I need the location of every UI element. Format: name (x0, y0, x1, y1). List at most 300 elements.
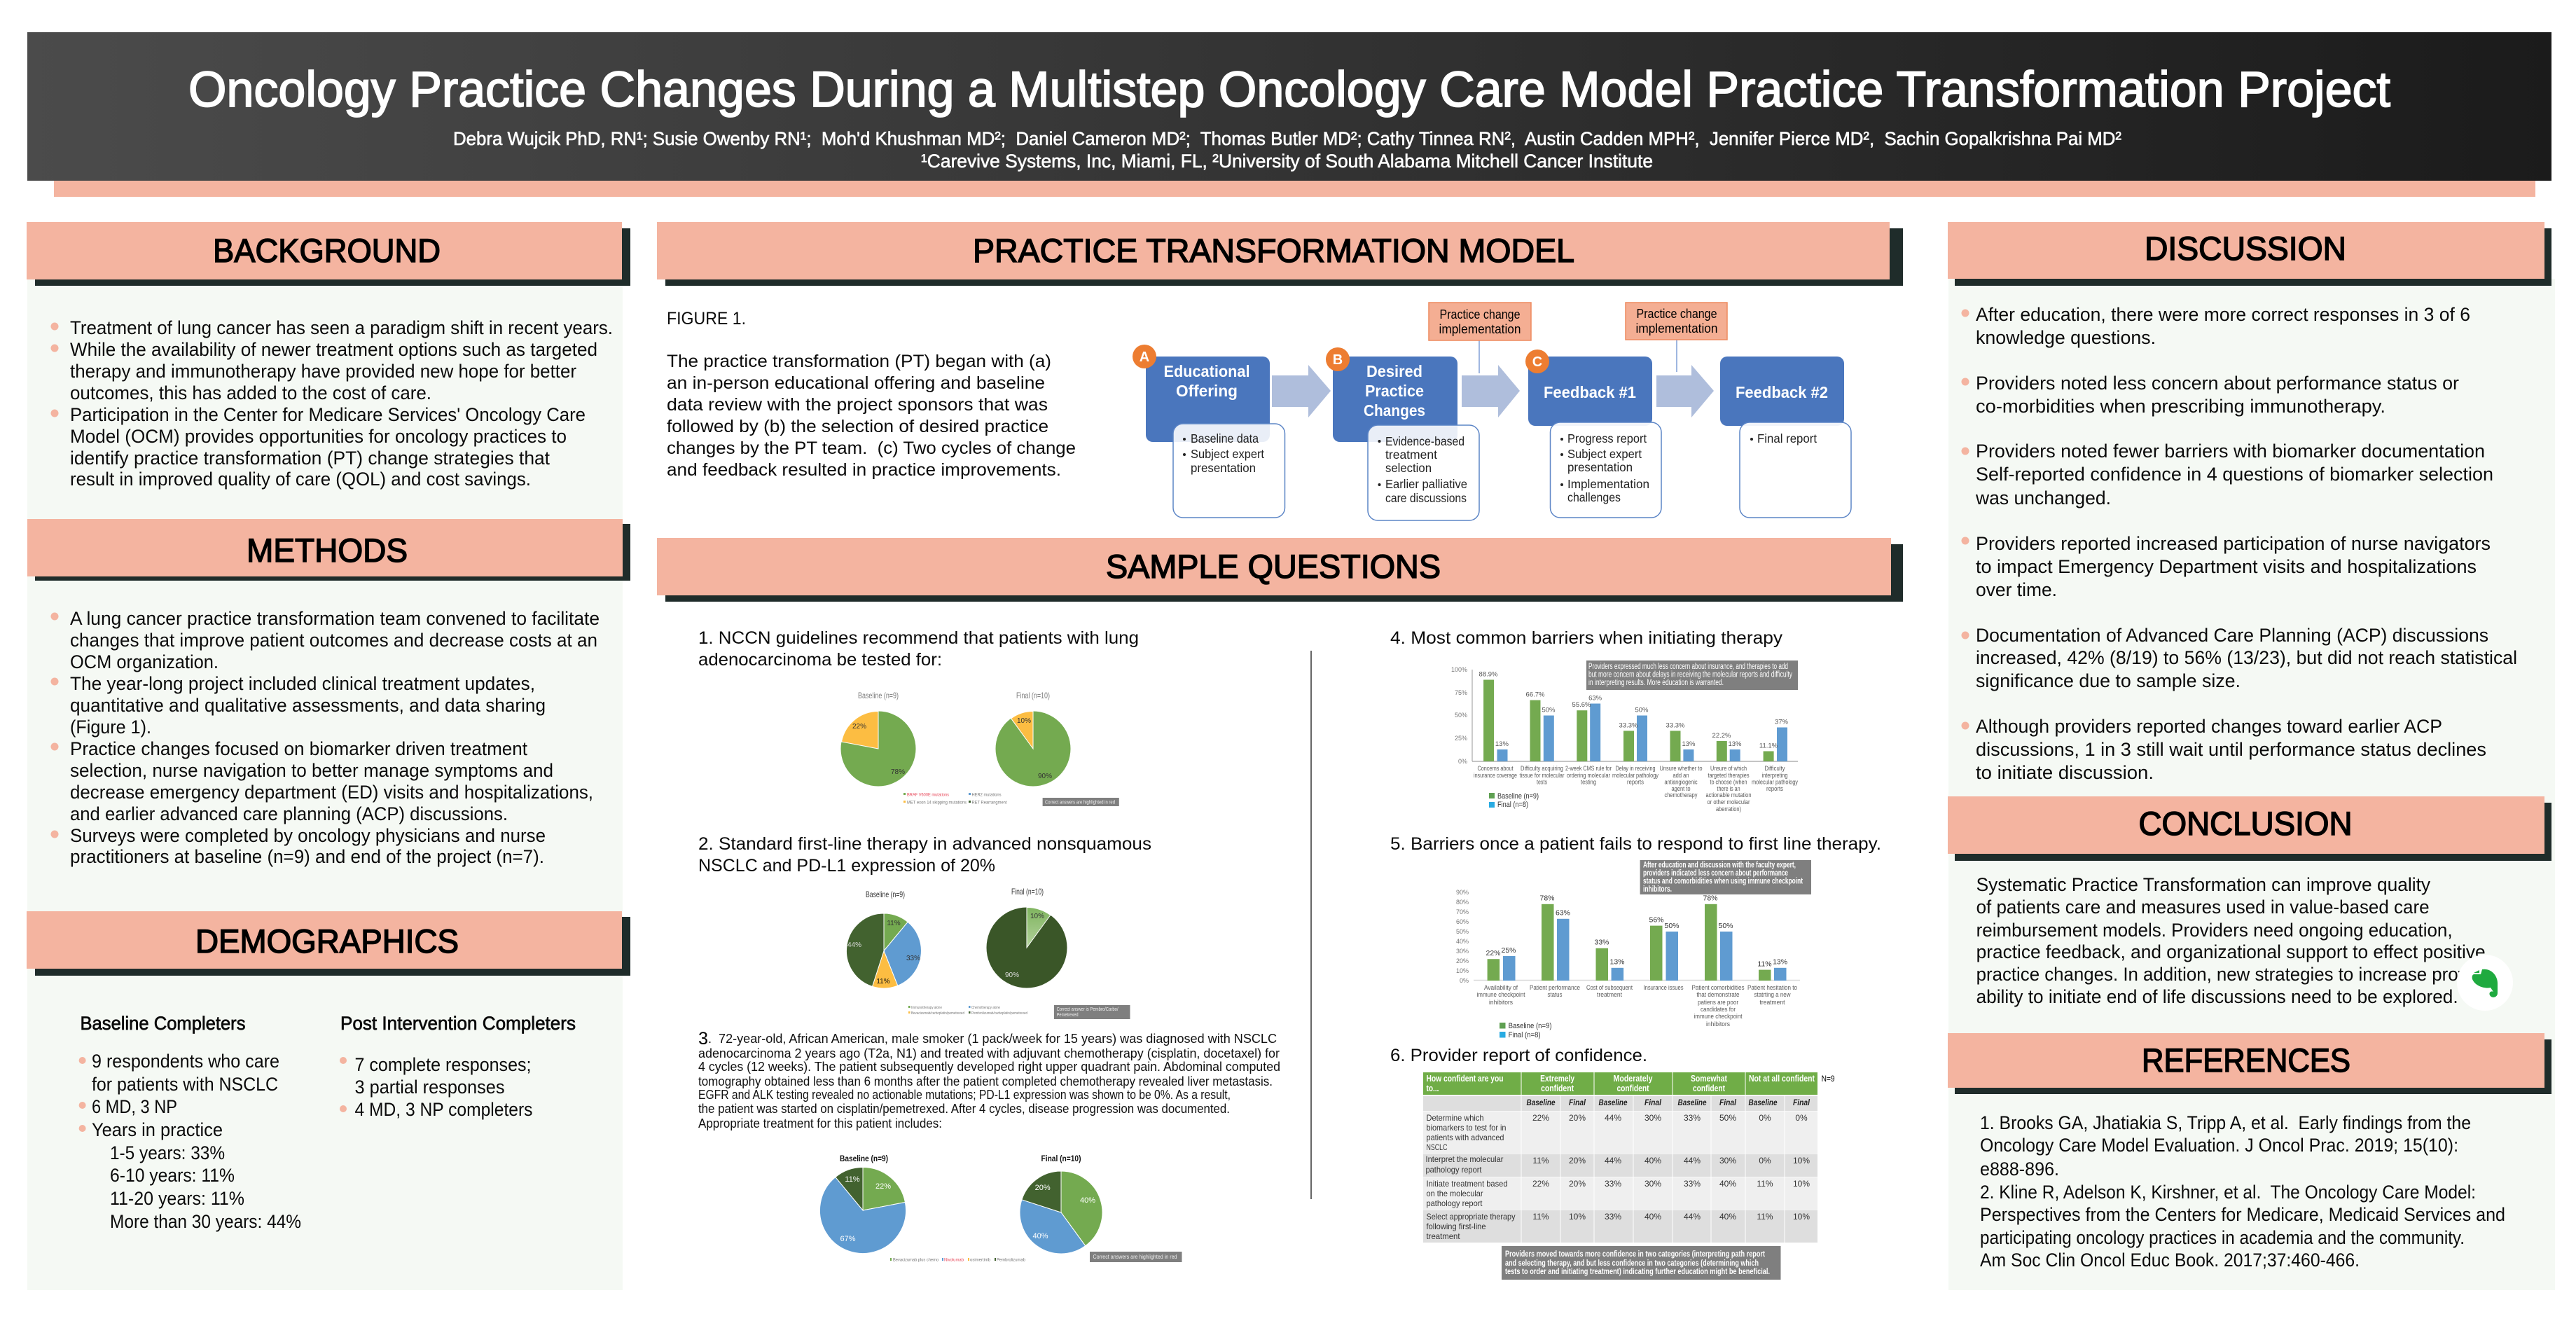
heading: practice transformation model: PRACTICE TRANSFORMATION MODEL (973, 232, 1574, 269)
discussion bullets: to impact Emergency Department visits and hospitalizations (1976, 556, 2477, 577)
question 3: 4 cycles (12 weeks). The patient subsequently developed right upper quadrant pain. Abdominal computed (698, 1060, 1280, 1074)
baseline completers: Baseline Completers (80, 1013, 245, 1034)
bar chart: q5: patiens are poor (1698, 999, 1738, 1006)
bar chart: q4: 25% (1455, 735, 1467, 742)
q6 callout: Providers moved towards more confidence in two categories (interpreting path report (1505, 1250, 1765, 1259)
table: provider confidence: 0% (1759, 1156, 1771, 1166)
methods bullets: Practice changes focused on biomarker driven treatment (70, 738, 527, 759)
reference list: 2. Kline R, Adelson K, Kirshner, et al. The Oncology Care Model: (1980, 1182, 2476, 1203)
table: provider confidence: 0% (1795, 1113, 1808, 1123)
background bullets (50, 317, 613, 490)
bar chart: q5: 78% (1539, 894, 1555, 902)
reference list (1980, 1112, 2505, 1271)
bar chart: q5: candidates for (1701, 1006, 1736, 1013)
table: provider confidence: confident (1693, 1084, 1726, 1093)
question 3: tomography obtained less than 6 months after the patient completed chemotherapy revealed liver metastasis. (698, 1074, 1273, 1088)
table: provider confidence: Baseline (1527, 1098, 1556, 1107)
bar chart: q4: reports (1766, 785, 1783, 792)
q1 note: Correct answers are highlighted in red (1045, 800, 1115, 805)
conclusion text (1976, 874, 2507, 1007)
question 5: 5. Barriers once a patient fails to respond to first line therapy. (1390, 834, 1881, 854)
bar chart: q5: Patient hesitation to (1747, 984, 1797, 991)
table: provider confidence: 33% (1684, 1113, 1701, 1123)
table: provider confidence: 40% (1719, 1179, 1736, 1189)
baseline completers: 1-5 years: 33% (110, 1142, 225, 1163)
conclusion text: practice changes. In addition, new strategies to increase providers (1976, 964, 2507, 985)
table: provider confidence: 44% (1684, 1156, 1701, 1166)
q2 note: Correct answer is Pembro/Carbo/ (1057, 1007, 1119, 1012)
background bullets: outcomes, this has added to the cost of care. (70, 382, 431, 403)
table: provider confidence: 44% (1605, 1156, 1621, 1166)
question 2 (698, 834, 1151, 1019)
baseline completers: Years in practice (92, 1119, 223, 1140)
pie chart: q1 baseline (840, 691, 916, 786)
discussion bullets: to initiate discussion. (1976, 762, 2154, 783)
bar chart: q5: 78% (1703, 894, 1718, 902)
callout: practice change 2 (1626, 303, 1727, 372)
methods bullets: changes that improve patient outcomes and decrease costs at an (70, 630, 597, 651)
table: provider confidence: 22% (1532, 1179, 1549, 1189)
discussion bullets: Documentation of Advanced Care Planning (ACP) discussions (1976, 625, 2488, 646)
discussion bullets: Although providers reported changes toward earlier ACP (1976, 716, 2442, 737)
discussion bullets: Providers noted fewer barriers with biomarker documentation (1976, 441, 2485, 462)
figure description: FIGURE 1. (667, 309, 746, 328)
bar chart: q4: 55.6% (1572, 701, 1591, 709)
q3 legend: Bevacizumab plus chemo (893, 1258, 939, 1262)
bar chart: q5: treatment (1759, 999, 1785, 1006)
pie chart: q1 final: 10% (1017, 717, 1031, 725)
question 1 (698, 628, 1139, 806)
bar chart: q4: Difficulty (1765, 765, 1785, 772)
q3 legend: osimertinib (970, 1258, 990, 1262)
q4 callout (1586, 660, 1798, 690)
pie chart: q1 final: 90% (1038, 773, 1052, 780)
bar chart: q4: Unsure of which (1710, 765, 1747, 772)
heading: discussion (1948, 222, 2551, 286)
methods bullets: and earlier advanced care planning (ACP) discussions. (70, 803, 508, 824)
q3 legend (890, 1258, 1025, 1262)
question 4 (1390, 628, 1798, 812)
right column background panel (1948, 279, 2555, 1290)
bar chart: q4: interpreting (1762, 772, 1787, 779)
q3 legend: Nivolumab (944, 1258, 964, 1262)
question 3: . 72-year-old, African American, male smoker (1 pack/week for 15 years) was diagnosed with NSCLC (708, 1032, 1277, 1046)
bar chart: q4: 66.7% (1526, 691, 1545, 699)
table: provider confidence: 0% (1759, 1113, 1771, 1123)
bar chart: q5: 50% (1456, 928, 1469, 935)
bar chart: q5: 33% (1594, 939, 1609, 947)
bar chart: q4: 100% (1451, 666, 1467, 673)
q5 legend (1500, 1022, 1552, 1039)
step C: feedback 1 (1525, 350, 1661, 518)
callout: practice change 2: Practice change (1636, 307, 1717, 321)
q4 callout: Providers expressed much less concern about insurance, and therapies to add (1588, 663, 1788, 671)
pie chart: q3 final (1020, 1154, 1102, 1254)
bar chart: q4: Unsure whether to (1660, 765, 1702, 772)
table: provider confidence: 10% (1793, 1212, 1810, 1222)
bar chart: q4: testing (1581, 779, 1596, 786)
table: provider confidence: 33% (1605, 1179, 1621, 1189)
pie chart: q1 baseline: 78% (891, 768, 905, 776)
bar chart: q4: tissue for molecular (1520, 772, 1565, 779)
table: provider confidence: confident (1616, 1084, 1649, 1093)
arrow 2 (1462, 365, 1520, 417)
bar chart: q4: Concerns about (1478, 765, 1514, 772)
reference list: 1. Brooks GA, Jhatiakia S, Tripp A, et al. Early findings from the (1980, 1112, 2471, 1133)
step A: educational offering: presentation (1191, 461, 1256, 475)
table: provider confidence: pathology report (1426, 1198, 1483, 1208)
conclusion text: ability to initiate end of life discussions need to be explored. (1976, 986, 2458, 1007)
step A: educational offering: Educational (1164, 362, 1249, 380)
title: Oncology Practice Changes During a Multistep Oncology Care Model Practice Transformation Project (188, 62, 2390, 118)
bar chart: q4: antiangiogenic (1664, 779, 1698, 786)
methods bullets: OCM organization. (70, 651, 219, 672)
discussion bullets: Providers noted less concern about performance status or (1976, 373, 2459, 394)
question 3: EGFR and ALK testing revealed no actionable mutations; PD-L1 expression was shown to be 0%. As a result, (698, 1088, 1231, 1102)
table: provider confidence: 10% (1793, 1156, 1810, 1166)
table: provider confidence: Select appropriate therapy (1426, 1212, 1516, 1222)
step B: desired practice changes: Evidence-based (1385, 434, 1464, 448)
table: provider confidence: patients with advanced (1426, 1133, 1504, 1142)
conclusion text: practice feedback, and organizational support to effect positive (1976, 941, 2486, 962)
bar chart: q5: statrting a new (1754, 991, 1791, 998)
bar chart: q4: tests (1537, 779, 1547, 786)
bar chart: q5: 22% (1486, 949, 1501, 957)
column divider (1310, 651, 1312, 1199)
panel: practice transformation model (657, 222, 1903, 520)
discussion bullets (1961, 304, 2517, 783)
bar chart: q4: or other molecular (1708, 798, 1750, 805)
pie chart: q3 baseline (819, 1154, 906, 1254)
table: provider confidence: Determine which (1426, 1113, 1483, 1123)
step B: desired practice changes: Earlier palliative (1385, 477, 1467, 491)
table: provider confidence: Extremely (1540, 1074, 1574, 1084)
heading: references: REFERENCES (2142, 1042, 2350, 1079)
panel: discussion (1948, 222, 2551, 783)
q1 legend: HER2 mutations (972, 793, 1002, 797)
step C: feedback 1: presentation (1567, 460, 1633, 474)
table: provider confidence: 20% (1569, 1156, 1586, 1166)
title banner (27, 32, 2551, 197)
table: provider confidence: 20% (1569, 1179, 1586, 1189)
panel: demographics (27, 911, 630, 1232)
methods bullets (50, 608, 600, 867)
bar chart: q4: 2-week CMS rule for (1565, 765, 1612, 772)
heading: demographics (27, 911, 630, 976)
baseline completers: More than 30 years: 44% (110, 1211, 301, 1232)
panel: sample questions (657, 538, 1903, 1280)
pie chart: q2 final: 90% (1005, 971, 1019, 979)
bar chart: q4: Difficulty acquiring (1521, 765, 1563, 772)
bar chart: q5: inhibitors (1489, 999, 1513, 1006)
q2 note (1054, 1005, 1130, 1019)
bar chart: q4: Delay in receiving (1615, 765, 1656, 772)
question 3: 3 (698, 1029, 708, 1049)
step D: feedback 2: Final report (1757, 431, 1817, 445)
q3 note: Correct answers are highlighted in red (1093, 1254, 1177, 1260)
pie chart: q1 baseline: 22% (852, 723, 866, 731)
heading: sample questions: SAMPLE QUESTIONS (1106, 548, 1441, 585)
heading: demographics: DEMOGRAPHICS (195, 922, 459, 960)
table: provider confidence: 33% (1605, 1212, 1621, 1222)
question 4: 4. Most common barriers when initiating therapy (1390, 628, 1783, 648)
bar chart: q4: 33.3% (1666, 721, 1685, 729)
table: provider confidence: 44% (1684, 1212, 1701, 1222)
bar chart: q4: 13% (1682, 740, 1696, 748)
authors: Debra Wujcik PhD, RN¹; Susie Owenby RN¹; Moh'd Khushman MD²; Daniel Cameron MD²; Thomas Butler MD²; Cathy Tinnea RN², Austin Cadden MPH², Jennifer Pierce MD², Sachin Gopalkrishna Pai MD² (453, 128, 2121, 149)
question 3: Appropriate treatment for this patient includes: (698, 1116, 942, 1130)
callout: practice change 1: implementation (1439, 322, 1521, 336)
discussion bullets: was unchanged. (1975, 487, 2111, 509)
bar chart: q4: 33.3% (1619, 721, 1638, 729)
q3 legend: Pembrolizumab (997, 1258, 1025, 1262)
bar chart: q4: 0% (1458, 758, 1467, 765)
table: provider confidence: Final (1719, 1098, 1737, 1107)
heading: conclusion: CONCLUSION (2139, 805, 2352, 842)
figure description: followed by (b) the selection of desired practice (667, 417, 1048, 436)
bar chart: q5: status (1548, 991, 1563, 998)
table: provider confidence: 11% (1532, 1156, 1549, 1166)
bar chart: q4: 88.9% (1479, 671, 1498, 678)
q2 note: Pemetrexed (1057, 1013, 1079, 1018)
step B: desired practice changes: treatment (1385, 448, 1437, 462)
methods bullets: A lung cancer practice transformation team convened to facilitate (70, 608, 600, 629)
bar chart: q4: molecular pathology (1752, 779, 1798, 786)
conclusion text: Systematic Practice Transformation can improve quality (1976, 874, 2431, 895)
table: provider confidence: 11% (1757, 1212, 1773, 1222)
bar chart: q4: 50% (1635, 706, 1649, 714)
post intervention completers: 4 MD, 3 NP completers (354, 1099, 532, 1120)
bar chart: q4: 63% (1588, 695, 1602, 702)
step C: feedback 1: Feedback #1 (1544, 383, 1636, 401)
step A: educational offering (1133, 345, 1284, 518)
question 3 (698, 1029, 1280, 1262)
discussion bullets: co-morbidities when prescribing immunotherapy. (1976, 396, 2385, 417)
q1 legend (903, 793, 1007, 805)
bar chart: q5: 11% (1757, 960, 1772, 968)
question 2: 2. Standard first-line therapy in advanced nonsquamous (698, 834, 1151, 854)
discussion bullets: After education, there were more correct responses in 3 of 6 (1976, 304, 2470, 325)
pie chart: q1 final: Final (n=10) (1016, 691, 1050, 700)
methods bullets: practitioners at baseline (n=9) and end of the project (n=7). (70, 846, 544, 867)
pie chart: q2 final: Final (n=10) (1011, 887, 1044, 897)
table: provider confidence: 22% (1532, 1113, 1549, 1123)
step B: desired practice changes: selection (1385, 461, 1432, 475)
icon: evernote elephant (2457, 955, 2513, 1011)
reference list: Am Soc Clin Oncol Educ Book. 2017;37:460-466. (1980, 1250, 2360, 1271)
heading: conclusion (1948, 796, 2551, 861)
pie chart: q1 baseline: Baseline (n=9) (858, 691, 899, 700)
background bullets: While the availability of newer treatment options such as targeted (70, 339, 597, 360)
table: provider confidence: Interpret the molecular (1426, 1154, 1503, 1164)
bar chart: q5: 13% (1773, 958, 1787, 967)
table: provider confidence: 30% (1644, 1113, 1661, 1123)
post intervention completers: Post Intervention Completers (340, 1013, 576, 1034)
reference list: participating oncology practices in academia and the community. (1980, 1227, 2465, 1248)
bar chart: q5: inhibitors (1706, 1021, 1730, 1028)
question 6: 6. Provider report of confidence. (1390, 1046, 1647, 1065)
figure description (667, 309, 1076, 480)
bar chart: q5: Cost of subsequent (1586, 984, 1633, 991)
table: provider confidence: Final (1569, 1098, 1586, 1107)
panel: background (27, 222, 630, 490)
table: provider confidence: Final (1644, 1098, 1662, 1107)
q2 legend: Immunotherapy alone (911, 1006, 942, 1010)
table: provider confidence: 10% (1569, 1212, 1586, 1222)
bar chart: q5: 60% (1456, 918, 1469, 925)
bar chart: q4: add an (1673, 772, 1689, 779)
conclusion text: reimbursement models. Providers need ongoing education, (1976, 920, 2453, 941)
table: provider confidence: 30% (1719, 1156, 1736, 1166)
pie chart: q2 baseline: 33% (906, 955, 920, 962)
heading: sample questions (657, 538, 1903, 602)
discussion bullets: significance due to sample size. (1976, 670, 2241, 691)
q4 callout: in interpreting results. More education is warranted. (1588, 679, 1724, 687)
background bullets: Treatment of lung cancer has seen a paradigm shift in recent years. (70, 317, 613, 338)
question 3: the patient was started on cisplatin/pemetrexed. After 4 cycles, disease progression was documented. (698, 1102, 1230, 1116)
post intervention completers: 3 partial responses (354, 1077, 504, 1098)
table: provider confidence: Baseline (1748, 1098, 1778, 1107)
table: provider confidence: Somewhat (1691, 1074, 1728, 1084)
q5 callout: After education and discussion with the faculty expert, (1643, 862, 1796, 870)
q5 legend: Final (n=8) (1509, 1031, 1541, 1039)
figure description: changes by the PT team. (c) Two cycles of change (667, 438, 1076, 458)
q2 legend: Bevacizumab/carboplatin/pemetrexed (911, 1011, 964, 1016)
table: provider confidence: Initiate treatment based (1426, 1179, 1507, 1189)
discussion bullets: Self-reported confidence in 4 questions of biomarker selection (1976, 464, 2493, 485)
bar chart: q4: 13% (1728, 740, 1742, 748)
bar chart: q4: 13% (1495, 740, 1509, 748)
bar chart: q4: there is an (1717, 785, 1740, 792)
methods bullets: quantitative and qualitative assessments, and data sharing (70, 695, 546, 716)
question 1: adenocarcinoma be tested for: (698, 650, 942, 670)
bar chart: q5: Patient performance (1530, 984, 1580, 991)
table: provider confidence: 40% (1644, 1212, 1661, 1222)
baseline completers: for patients with NSCLC (92, 1074, 278, 1095)
heading: background: BACKGROUND (213, 232, 441, 269)
background bullets: result in improved quality of care (QOL) and cost savings. (70, 469, 531, 490)
heading: background (27, 222, 630, 286)
q1 note (1043, 798, 1119, 806)
step B: desired practice changes: B (1333, 352, 1343, 368)
panel: conclusion (1948, 796, 2551, 1011)
bar chart: q4: ordering molecular (1567, 772, 1610, 779)
bar chart: q4: 11.1% (1759, 742, 1778, 749)
q4 legend (1489, 792, 1539, 809)
pie chart: q3 baseline: 11% (845, 1175, 860, 1184)
bar chart: q5: 10% (1456, 967, 1469, 974)
question 5 (1390, 834, 1881, 1039)
pie chart: q2 baseline (846, 890, 921, 988)
pie chart: q2 final: 10% (1030, 913, 1044, 920)
left column background panel (27, 279, 623, 1290)
step B: desired practice changes: Changes (1364, 401, 1425, 420)
bar chart: q5: 40% (1456, 938, 1469, 945)
bar chart: q4: reports (1627, 779, 1644, 786)
step A: educational offering: A (1140, 350, 1149, 365)
step A: educational offering: Baseline data (1191, 431, 1259, 445)
bar chart: q5: 56% (1649, 916, 1664, 925)
step A: educational offering: Subject expert (1191, 447, 1264, 461)
reference list: e888-896. (1980, 1159, 2059, 1180)
methods bullets: decrease emergency department (ED) visits and hospitalizations, (70, 782, 593, 803)
q6 callout (1502, 1246, 1780, 1280)
discussion bullets: increased, 42% (8/19) to 56% (13/23), but did not reach statistical (1976, 647, 2517, 668)
bar chart: q5: 13% (1609, 958, 1625, 967)
step C: feedback 1: Implementation (1567, 477, 1649, 491)
step D: feedback 2: Feedback #2 (1736, 383, 1828, 401)
table: provider confidence: 40% (1719, 1212, 1736, 1222)
pie chart: q1 final (996, 691, 1070, 786)
step B: desired practice changes: Practice (1365, 382, 1424, 400)
bar chart: q4: 50% (1542, 706, 1556, 714)
bar chart: q5: immune checkpoint (1476, 991, 1525, 998)
table: provider confidence: treatment (1426, 1231, 1460, 1241)
bar chart: q5 (1456, 889, 1800, 1028)
table: provider confidence: Moderately (1614, 1074, 1653, 1084)
bar chart: q4: 37% (1775, 719, 1789, 726)
table: provider confidence: 33% (1684, 1179, 1701, 1189)
bar chart: q5: 70% (1456, 908, 1469, 915)
question 3: adenocarcinoma 2 years ago (T2a, N1) and treated with adjuvant chemotherapy (cisplatin, docetaxel) for (698, 1046, 1280, 1060)
figure description: and feedback resulted in practice improvements. (667, 460, 1061, 480)
pie chart: q3 final: 40% (1032, 1232, 1048, 1240)
heading: discussion: DISCUSSION (2145, 230, 2346, 267)
table: provider confidence: on the molecular (1426, 1189, 1483, 1198)
bar chart: q5: 30% (1456, 948, 1469, 955)
bar chart: q5: 50% (1664, 922, 1680, 930)
table: provider confidence: following first-line (1426, 1222, 1486, 1231)
q4 legend: Final (n=8) (1497, 801, 1528, 809)
bar chart: q5: 0% (1460, 977, 1469, 984)
pie chart: q3 final: 20% (1035, 1184, 1051, 1192)
bar chart: q5: 80% (1456, 899, 1469, 906)
table: provider confidence: N=9 (1822, 1074, 1835, 1084)
pie chart: q2 final (986, 887, 1067, 988)
heading: methods (27, 519, 630, 581)
methods bullets: selection, nurse navigation to better manage symptoms and (70, 760, 553, 781)
table: provider confidence: confident (1541, 1084, 1574, 1093)
table: provider confidence: 11% (1532, 1212, 1549, 1222)
q2 legend: Pembrolizumab/carboplatin/pemetrexed (971, 1011, 1027, 1016)
q1 legend: MET exon 14 skipping mutations (907, 800, 967, 805)
post intervention completers (340, 1013, 576, 1120)
bar chart: q5: Insurance issues (1643, 984, 1684, 991)
q4 legend: Baseline (n=9) (1497, 792, 1539, 801)
table: provider confidence: 30% (1644, 1179, 1661, 1189)
bar chart: q4: aberration) (1716, 805, 1741, 812)
post intervention completers: 7 complete responses; (354, 1054, 531, 1075)
bar chart: q5: 63% (1556, 909, 1570, 918)
q5 callout: inhibitors. (1643, 885, 1672, 894)
step C: feedback 1: Progress report (1567, 431, 1647, 445)
bar chart: q4: insurance coverage (1474, 772, 1517, 779)
step C: feedback 1: C (1532, 354, 1542, 370)
discussion bullets: Providers reported increased participation of nurse navigators (1976, 533, 2491, 554)
table: provider confidence: How confident are you (1426, 1074, 1503, 1084)
bar chart: q4: 50% (1455, 712, 1467, 719)
table: provider confidence: pathology report (1426, 1165, 1482, 1175)
bar chart: q5: treatment (1597, 991, 1622, 998)
table: provider confidence: biomarkers to test for in (1426, 1123, 1506, 1133)
table: provider confidence: Final (1793, 1098, 1810, 1107)
figure description: an in-person educational offering and baseline (667, 373, 1045, 393)
background bullets: Participation in the Center for Medicare Services' Oncology Care (70, 404, 586, 425)
reference list: Perspectives from the Centers for Medicare, Medicaid Services and (1980, 1204, 2505, 1225)
table: provider confidence: Baseline (1678, 1098, 1707, 1107)
table: provider confidence: 40% (1644, 1156, 1661, 1166)
methods bullets: The year-long project included clinical treatment updates, (70, 673, 535, 694)
